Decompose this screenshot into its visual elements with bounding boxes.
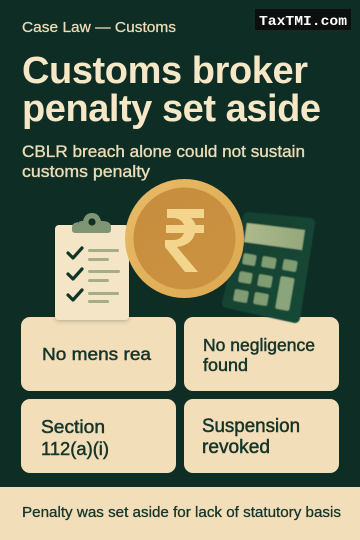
card: No mens rea: No mens rea [42,344,151,364]
checklist rows [68,248,82,300]
card: No negligence found: found [203,355,248,375]
card: No negligence found [184,317,339,391]
card: No negligence found: No negligence [203,335,315,355]
card: Section 112(a)(i): Section [41,417,105,437]
subtitle: CBLR breach alone could not sustain [22,143,305,161]
card: Suspension revoked [184,399,339,473]
icon: clipboard checklist [55,213,129,320]
title [22,50,321,130]
calculator screen [244,223,305,250]
card: No mens rea [21,317,176,391]
watermark badge: TaxTMI.com: TaxTMI.com [259,14,347,30]
footer band: Penalty was set aside for lack of statutory basis [22,505,341,521]
rupee glyph [165,209,204,272]
coin face [134,188,236,290]
clipboard clip [72,213,111,233]
watermark badge: TaxTMI.com [255,9,351,30]
card: Suspension revoked: Suspension [202,416,300,437]
footer band [0,487,360,540]
subtitle [22,143,305,181]
icon: calculator [227,217,310,318]
card: Section 112(a)(i): 112(a)(i) [41,439,109,459]
calculator body [227,217,310,318]
subtitle: customs penalty [22,163,151,181]
calculator keys [233,253,298,311]
clipboard sheet [55,225,129,320]
title: penalty set aside [22,88,321,130]
coin rim [125,179,244,298]
title: Customs broker [22,50,308,92]
card: Section 112(a)(i) [21,399,176,473]
kicker: Case Law — Customs: Case Law — Customs [22,20,176,36]
card: Suspension revoked: revoked [202,437,270,458]
icon: rupee coin [125,179,244,298]
